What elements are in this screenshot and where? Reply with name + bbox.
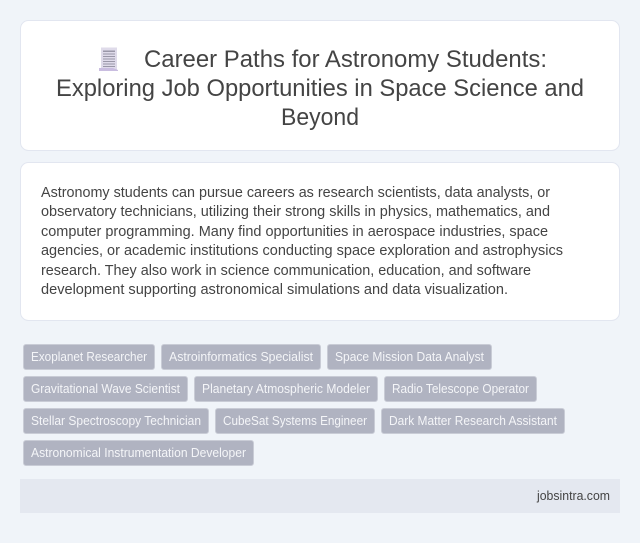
- tag: Space Mission Data Analyst: [328, 344, 492, 370]
- tag: CubeSat Systems Engineer: [216, 408, 374, 434]
- tag: Radio Telescope Operator: Radio Telescope Operator: [392, 381, 530, 396]
- title: Career Paths for Astronomy Students:: [144, 46, 547, 73]
- tag: Radio Telescope Operator: [384, 376, 536, 402]
- tag: Planetary Atmospheric Modeler: [194, 376, 378, 402]
- tag: Gravitational Wave Scientist: [24, 376, 188, 402]
- text block: description: development supporting astronomical simulations and data visualization.: [41, 282, 508, 298]
- tag: Stellar Spectroscopy Technician: Stellar Spectroscopy Technician: [31, 413, 201, 428]
- text block: description: [41, 185, 563, 298]
- footer source text: jobsintra.com: [536, 488, 610, 503]
- text block: description: Astronomy students can pursue careers as research scientists, data analysts, or: [41, 185, 550, 201]
- tag: Astroinformatics Specialist: [162, 344, 320, 370]
- title: Beyond: [281, 104, 359, 131]
- tag: Dark Matter Research Assistant: Dark Matter Research Assistant: [389, 413, 557, 428]
- title: Exploring Job Opportunities in Space Science and: [56, 75, 584, 102]
- panel: title card: [20, 20, 620, 150]
- text block: description: observatory technicians, utilizing their strong skills in physics, mathematics, and: [41, 204, 550, 220]
- tag: Astronomical Instrumentation Developer: Astronomical Instrumentation Developer: [31, 445, 247, 460]
- panel: description: [20, 162, 620, 320]
- title: [56, 46, 584, 131]
- tag: Exoplanet Researcher: Exoplanet Researcher: [31, 349, 148, 364]
- tag: Astroinformatics Specialist: Astroinformatics Specialist: [169, 349, 313, 364]
- text block: description: agencies, or academic institutions conducting space exploration and astrophysics: [41, 243, 563, 259]
- panel: career tags: [24, 344, 564, 466]
- text block: description: computer programming. Many find opportunities in aerospace industries, space: [41, 224, 548, 240]
- tag: Planetary Atmospheric Modeler: Planetary Atmospheric Modeler: [202, 381, 371, 396]
- tag: Gravitational Wave Scientist: Gravitational Wave Scientist: [31, 381, 180, 396]
- tag: CubeSat Systems Engineer: CubeSat Systems Engineer: [223, 413, 368, 428]
- text block: description: research. They also work in science communication, education, and software: [41, 263, 531, 279]
- icon: scroll document: [99, 48, 118, 71]
- footer: [20, 479, 620, 513]
- tag: Exoplanet Researcher: [24, 344, 154, 370]
- tag: Astronomical Instrumentation Developer: [24, 440, 254, 466]
- tag: Space Mission Data Analyst: Space Mission Data Analyst: [335, 349, 484, 364]
- tag: Stellar Spectroscopy Technician: [24, 408, 208, 434]
- tag: Dark Matter Research Assistant: [382, 408, 564, 434]
